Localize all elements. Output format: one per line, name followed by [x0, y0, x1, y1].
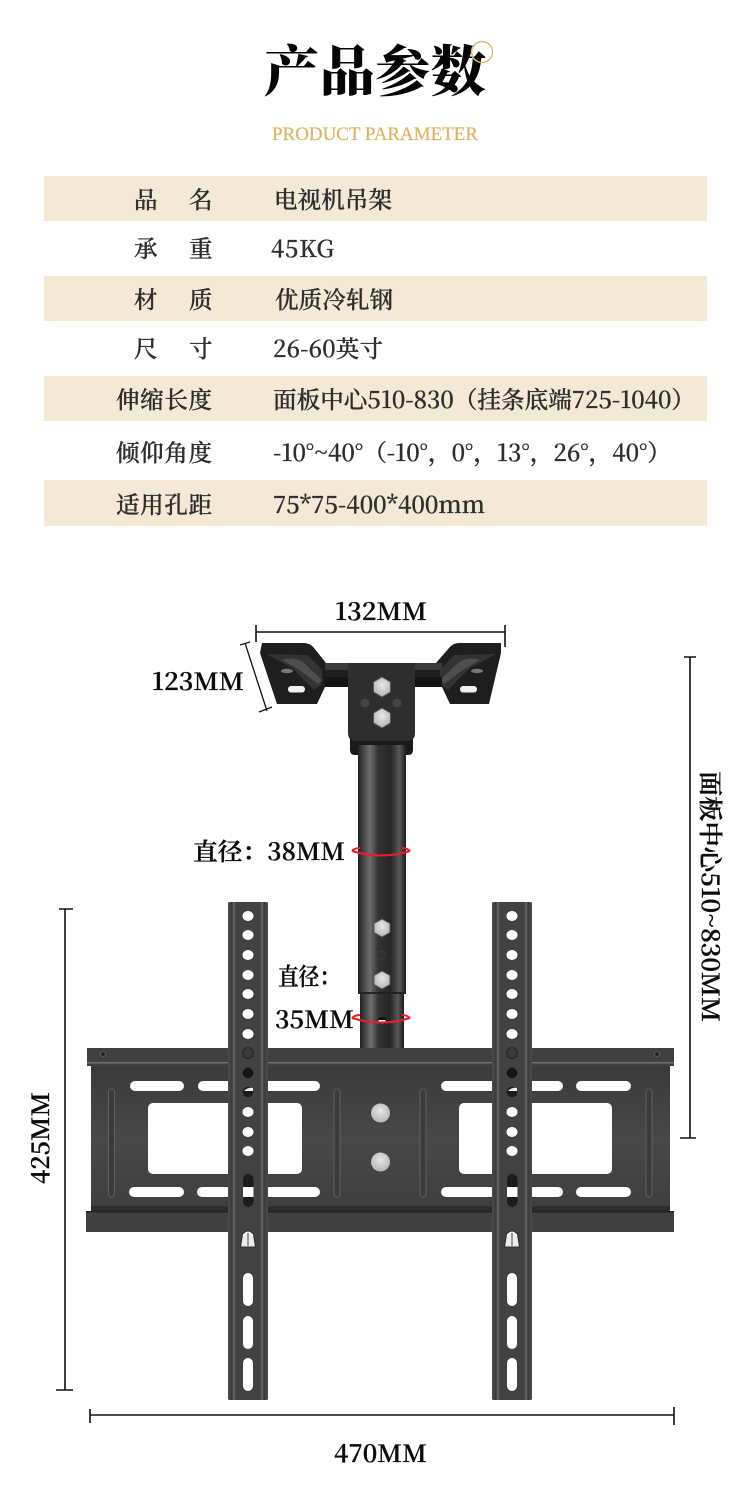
- mounting plate: [348, 663, 415, 741]
- row: hole spacing: [44, 480, 707, 526]
- lower tube: [358, 992, 406, 1050]
- dimension: panel centre height: 面板中心510~830MM: [695, 771, 730, 1022]
- row: hole spacing: 适用孔距: [116, 486, 212, 520]
- dimension: 123MM depth: [152, 642, 272, 712]
- row: material: 优质冷轧钢: [275, 281, 393, 315]
- row: product name: 电视机吊架: [274, 181, 392, 215]
- row: tilt angle: 倾仰角度: [116, 434, 212, 468]
- dimension: panel centre height: [680, 657, 730, 1138]
- ceiling bracket: [260, 643, 501, 994]
- row: product name: [44, 176, 707, 221]
- row: extension length: 面板中心510-830（挂条底端725-1040）: [273, 381, 695, 415]
- row: material: 材: [134, 281, 158, 315]
- row: load: 45KG: [271, 230, 334, 264]
- centre holes: [371, 1104, 390, 1172]
- row: tilt angle: -10°~40°（-10°，0°，13°，26°，40°）: [273, 434, 671, 468]
- dimension: 425MM height: [21, 909, 73, 1390]
- left vertical strap: [228, 902, 268, 1400]
- panel: parameter table: [44, 176, 707, 526]
- row: load: [134, 230, 334, 264]
- label: diameter 38MM: 直径：38MM: [193, 832, 345, 867]
- plate body: [91, 1066, 670, 1212]
- row: material: [44, 276, 707, 321]
- plate bolts: [360, 677, 402, 728]
- top flange: [87, 1048, 674, 1066]
- slots: [129, 1081, 631, 1197]
- windows: [148, 1103, 302, 1174]
- foot holes: [281, 669, 483, 692]
- row: size: 26-60英寸: [273, 330, 383, 364]
- row: extension length: 伸缩长度: [116, 381, 212, 415]
- dimension: 470MM width: 470MM: [334, 1434, 427, 1469]
- row: load: 承: [134, 230, 158, 264]
- tube bolts: [374, 919, 390, 989]
- right vertical strap: [492, 902, 532, 1400]
- row: extension length: [44, 376, 707, 421]
- dimension: 132MM width: 132MM: [335, 592, 427, 627]
- row: hole spacing: 75*75-400*400mm: [273, 486, 485, 520]
- subtitle: PRODUCT PARAMETER: [272, 125, 479, 145]
- bracket feet and bar: [260, 643, 501, 704]
- row: product name: 品: [134, 181, 158, 215]
- stiffening ribs: [108, 1089, 652, 1197]
- wall plate: [86, 1048, 674, 1232]
- row: load: 重: [189, 230, 212, 264]
- diameter ring 38MM: [352, 848, 410, 856]
- diameter ring 35MM: [352, 1015, 410, 1022]
- row: size: [134, 330, 383, 364]
- dimension: 132MM width: [256, 592, 505, 647]
- rear bracket skirt: [350, 735, 413, 755]
- title: 产品参数: [264, 28, 486, 107]
- icon: gold circle accent: [472, 42, 492, 62]
- row: size: 寸: [189, 330, 212, 364]
- bottom flange: [86, 1211, 674, 1232]
- row: material: 质: [189, 281, 212, 315]
- upper tube: [358, 745, 406, 994]
- dimension: 425MM height: 425MM: [21, 1092, 56, 1184]
- label: diameter: 直径：: [278, 957, 340, 992]
- label: 35MM: 35MM: [275, 1000, 354, 1035]
- dimension: 470MM width: [90, 1407, 674, 1469]
- row: size: 尺: [134, 330, 158, 364]
- dimension: 123MM depth: 123MM: [152, 662, 244, 697]
- row: product name: 名: [189, 181, 212, 215]
